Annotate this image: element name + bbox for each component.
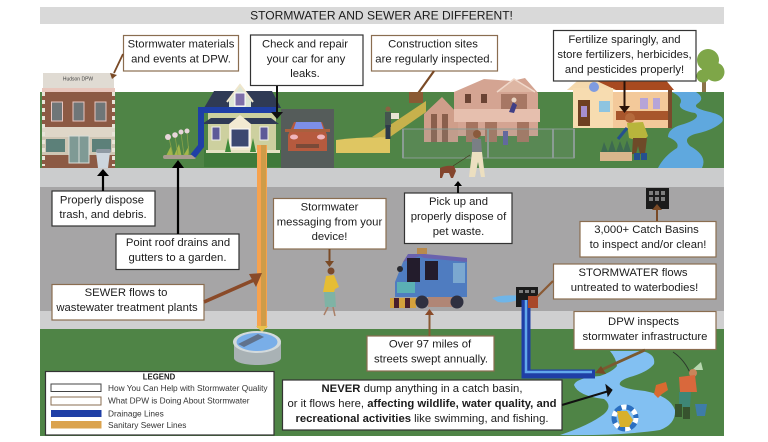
callout: never dump: NEVER dump anything in a catch basin, <box>322 383 522 395</box>
callout: fertilize sparingly: store fertilizers, herbicides, <box>557 49 692 61</box>
arrow: to street catch basin <box>528 281 553 308</box>
callout: stormwater materials: Stormwater materials <box>128 38 235 50</box>
callout: pick up pet waste: properly dispose of <box>411 211 507 223</box>
arrow: to river <box>562 385 612 405</box>
legend item: drainage lines: Drainage Lines <box>108 408 164 418</box>
arrow: to pedestrian <box>325 249 334 267</box>
arrow: to DPW building <box>110 54 123 79</box>
callout: catch basins: to inspect and/or clean! <box>590 239 706 251</box>
drainage line <box>526 300 595 374</box>
arrow: to outfall <box>595 350 645 374</box>
sanitary sewer line <box>256 145 268 332</box>
icon: chain-link fence <box>403 129 574 158</box>
callout: catch basins: 3,000+ Catch Basins <box>594 224 699 236</box>
callout: point roof drains: Point roof drains and <box>126 237 230 249</box>
icon: house with gardener's yard <box>567 75 674 128</box>
icon: pedestrian with phone <box>323 268 339 316</box>
legend item: what DPW is doing: What DPW is Doing About Stormwater <box>108 396 250 406</box>
callout: never dump <box>282 380 562 430</box>
icon: Hudson DPW building: Hudson DPW <box>63 76 93 82</box>
callout: sewer flows <box>52 284 204 320</box>
callout: pick up pet waste <box>404 193 512 244</box>
callout: point roof drains <box>116 234 239 270</box>
callout: DPW inspects: DPW inspects <box>608 316 679 328</box>
icon: catch basin with water <box>492 287 538 307</box>
callout: check and repair: Check and repair <box>262 38 348 50</box>
icon: upper river <box>658 92 723 168</box>
legend item: drainage lines <box>51 408 164 418</box>
arrow: to sanitary sewer <box>204 273 262 302</box>
icon: trash can <box>96 149 111 168</box>
title: STORMWATER AND SEWER ARE DIFFERENT! <box>250 8 513 22</box>
callout: DPW inspects: stormwater infrastructure <box>583 331 707 343</box>
icon: Hudson DPW building <box>42 73 115 168</box>
callout: stormwater flows <box>554 264 716 299</box>
legend item: how you can help: How You Can Help with Stormwater Quality <box>108 383 268 393</box>
callout: point roof drains: gutters to a garden. <box>129 252 226 264</box>
title <box>40 7 724 24</box>
callout: construction sites: are regularly inspected. <box>375 54 493 66</box>
arrow: to car <box>271 86 283 119</box>
callout: check and repair: leaks. <box>290 68 320 80</box>
arrow: to sweeper <box>425 309 434 336</box>
legend item: sanitary sewer lines <box>51 420 186 430</box>
icon: jumping fish <box>654 382 668 398</box>
arrow: to trash can <box>97 169 109 191</box>
icon: woman walking dog <box>440 130 485 178</box>
callout: sewer flows: wastewater treatment plants <box>55 302 198 314</box>
callout: stormwater messaging: device! <box>312 231 347 243</box>
icon: fisherman and bucket <box>673 352 707 419</box>
callout: DPW inspects <box>574 312 716 350</box>
callout: streets swept: Over 97 miles of <box>389 338 472 350</box>
callout: fertilize sparingly <box>554 30 696 81</box>
arrow: to construction site <box>409 71 434 103</box>
icon: lower river <box>560 351 675 435</box>
callout: sewer flows: SEWER flows to <box>85 287 167 299</box>
callout: stormwater flows: STORMWATER flows <box>578 267 688 279</box>
legend: LEGEND <box>143 372 176 382</box>
callout: properly dispose trash: Properly dispose <box>60 194 144 206</box>
arrow: to gardener <box>619 81 630 113</box>
callout: stormwater messaging: Stormwater <box>301 202 359 214</box>
icon: wastewater treatment tank <box>233 331 281 365</box>
callout: never dump: or it flows here, affecting wildlife, water quality, and <box>287 398 557 410</box>
callout: construction sites: Construction sites <box>388 38 478 50</box>
callout: fertilize sparingly: Fertilize sparingly, and <box>568 34 681 46</box>
callout: fertilize sparingly: and pesticides properly! <box>565 64 684 76</box>
callout: never dump: recreational activities like swimming, and fishing. <box>295 413 549 425</box>
icon: tree <box>696 49 724 92</box>
icon: house with roof drain <box>193 85 281 167</box>
callout: stormwater messaging <box>274 198 386 249</box>
callout: stormwater materials: and events at DPW. <box>131 54 231 66</box>
callout: check and repair: your car for any <box>267 54 346 66</box>
arrow: to garden <box>172 160 184 234</box>
legend item: sanitary sewer lines: Sanitary Sewer Lines <box>108 420 186 430</box>
icon: houses under construction <box>424 78 540 145</box>
icon: catch basin on street <box>646 188 669 209</box>
icon: rain garden flowers <box>163 128 196 159</box>
callout: construction sites <box>372 36 498 71</box>
arrow: to catch basin <box>652 204 662 221</box>
callout: catch basins <box>580 222 716 257</box>
arrow: to dog <box>454 181 462 193</box>
scene background: lawn, sidewalk and street <box>40 92 724 436</box>
icon: street sweeper <box>390 248 467 308</box>
icon: driveway and car <box>281 109 334 168</box>
callout: properly dispose trash <box>52 191 155 226</box>
callout: stormwater messaging: messaging from your <box>277 216 382 228</box>
legend <box>46 372 274 435</box>
icon: construction materials and worker <box>336 101 426 153</box>
callout: check and repair <box>250 35 363 86</box>
icon: gardener with plant bed <box>600 113 648 161</box>
icon: life ring with fish <box>614 407 636 429</box>
callout: stormwater flows: untreated to waterbodies! <box>571 282 698 294</box>
callout: streets swept <box>367 336 494 371</box>
callout: properly dispose trash: trash, and debris. <box>59 209 147 221</box>
callout: stormwater materials <box>124 36 238 71</box>
callout: pick up pet waste: pet waste. <box>433 226 484 238</box>
callout: pick up pet waste: Pick up and <box>429 196 488 208</box>
callout: streets swept: streets swept annually. <box>374 354 488 366</box>
